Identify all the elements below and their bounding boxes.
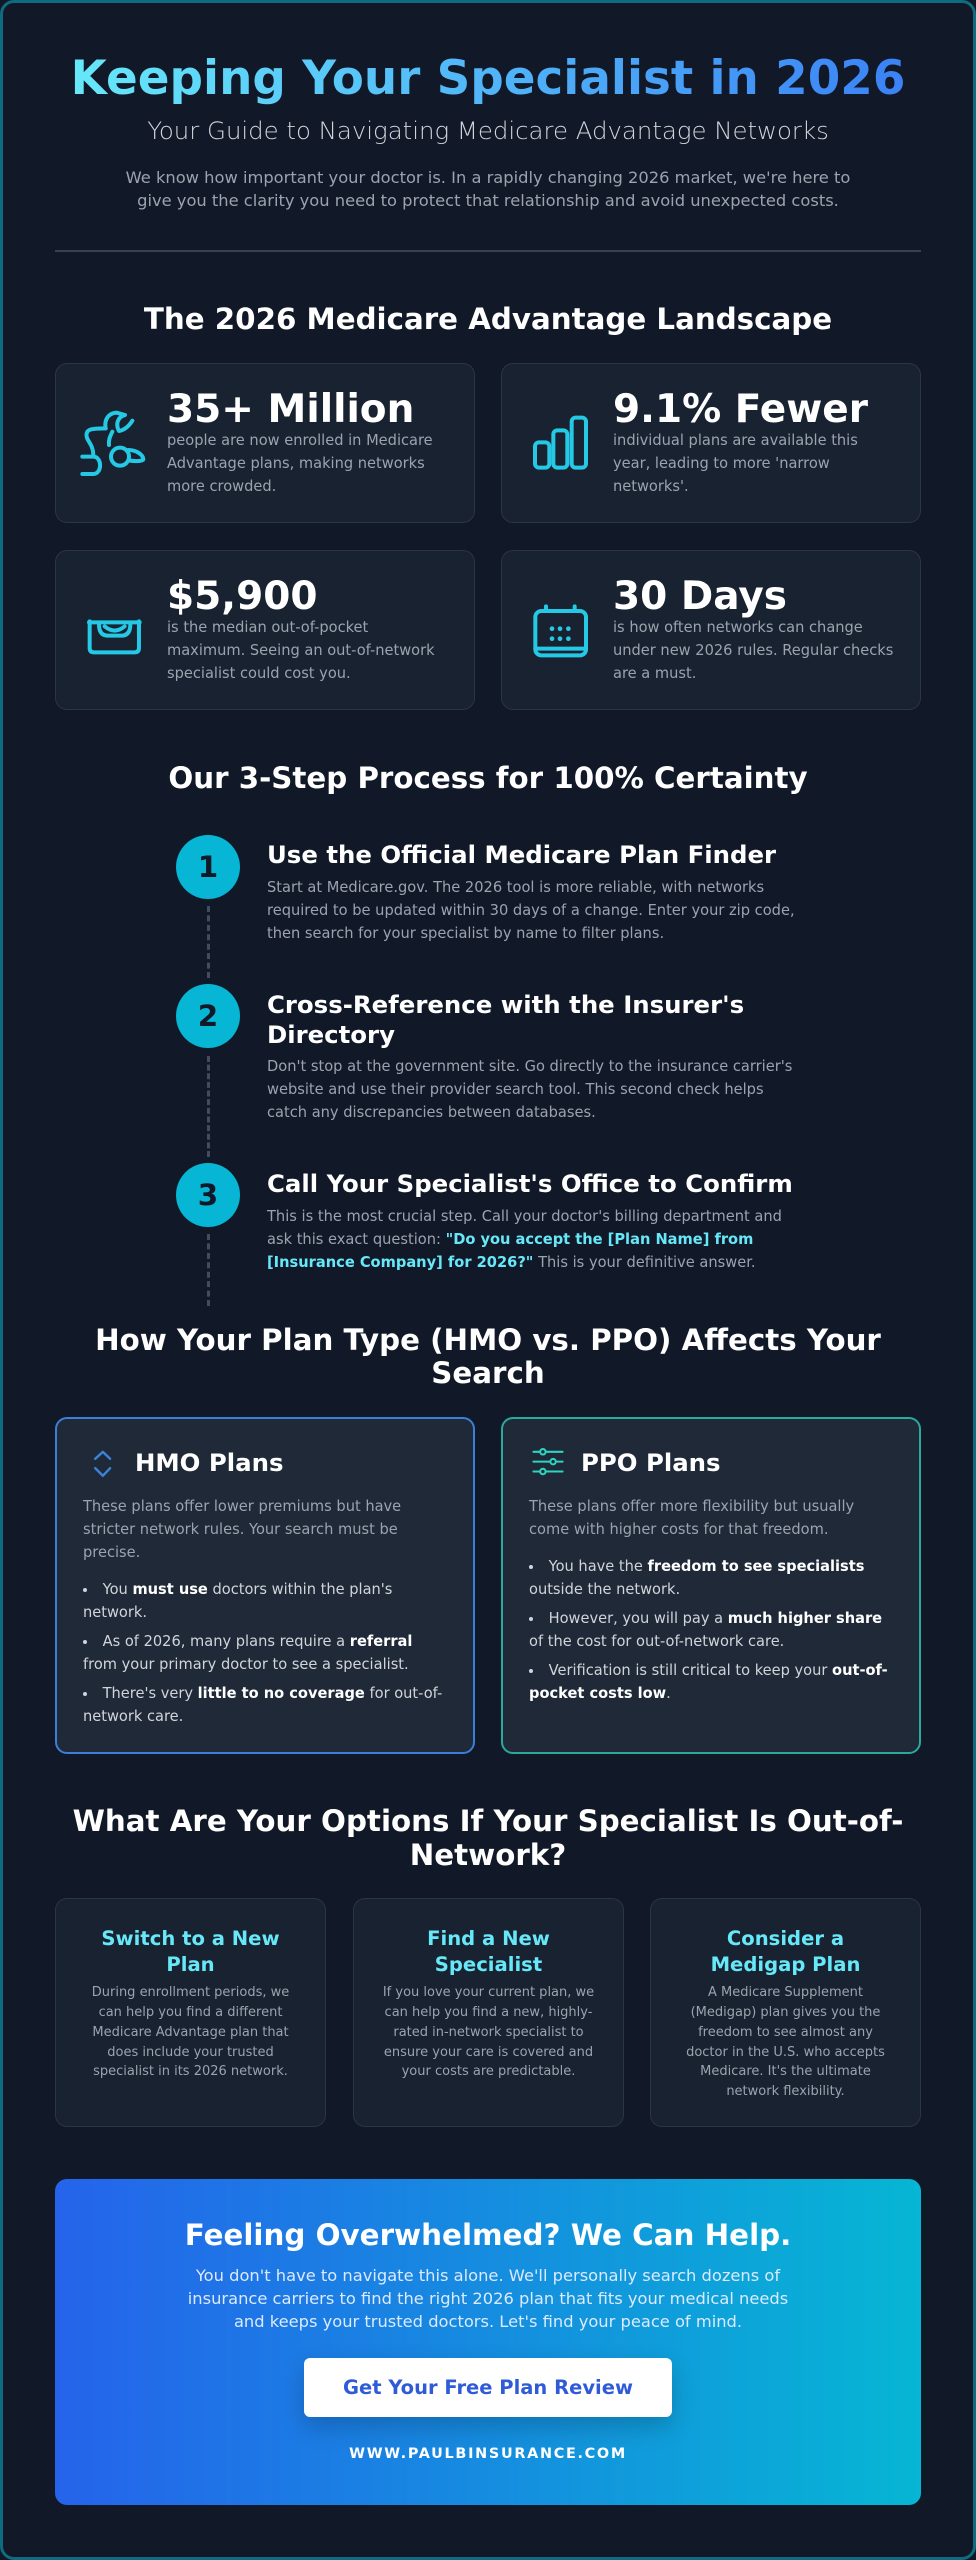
step text	[266, 1208, 782, 1270]
step title: Use the Official Medicare Plan Finder	[267, 840, 776, 869]
step number: 2	[198, 999, 218, 1033]
step text: [Insurance Company] for 2026?" This is your definitive answer.	[267, 1254, 756, 1270]
stat number: 9.1% Fewer	[613, 387, 868, 432]
option text: your costs are predictable.	[402, 2064, 575, 2079]
option title: Consider a	[727, 1926, 844, 1950]
option text: ensure your care is covered and	[384, 2045, 593, 2060]
stat description: individual plans are available this	[613, 432, 858, 449]
plan bullets: from your primary doctor to see a specialist.	[83, 1656, 409, 1673]
option text: (Medigap) plan gives you the	[691, 2005, 880, 2020]
option text: A Medicare Supplement	[708, 1985, 863, 2000]
divider	[55, 250, 921, 252]
cta text	[188, 2266, 788, 2331]
stat description: Advantage plans, making networks	[167, 455, 425, 472]
stat description: under new 2026 rules. Regular checks	[613, 642, 893, 659]
cta text: insurance carriers to find the right 2026 plan that fits your medical needs	[188, 2289, 788, 2308]
plan bullets: network.	[83, 1604, 147, 1621]
cta text: and keeps your trusted doctors. Let's find your peace of mind.	[234, 2312, 742, 2331]
option text	[92, 1985, 289, 2079]
stat description	[613, 619, 893, 682]
stat number: 30 Days	[613, 574, 787, 619]
stat description: people are now enrolled in Medicare	[167, 432, 433, 449]
option text: freedom to see almost any	[698, 2025, 873, 2040]
step text: required to be updated within 30 days of a change. Enter your zip code,	[267, 902, 795, 919]
cta heading: Feeling Overwhelmed? We Can Help.	[185, 2218, 791, 2252]
plan bullets: network care.	[83, 1708, 183, 1725]
heading: options: Network?	[410, 1838, 566, 1872]
stat description: specialist could cost you.	[167, 665, 351, 682]
option text: During enrollment periods, we	[92, 1985, 289, 2000]
connector line 1	[207, 906, 210, 978]
plan intro: precise.	[83, 1544, 140, 1561]
connector line 2	[207, 1056, 210, 1157]
step text: This is the most crucial step. Call your doctor's billing department and	[267, 1208, 782, 1224]
plan bullets: outside the network.	[529, 1581, 680, 1598]
plan intro: These plans offer lower premiums but have	[83, 1498, 401, 1515]
title: Keeping Your Specialist in 2026	[71, 52, 905, 106]
cta button: Get Your Free Plan Review	[343, 2376, 633, 2399]
panel: stat 35+ million	[55, 363, 475, 523]
option text: network flexibility.	[726, 2084, 845, 2099]
stat description	[167, 432, 433, 495]
panel: stat 9.1% fewer	[501, 363, 921, 523]
step text: Don't stop at the government site. Go directly to the insurance carrier's	[267, 1058, 792, 1075]
stat description: year, leading to more 'narrow	[613, 455, 830, 472]
step 1	[176, 835, 795, 942]
step title: Directory	[267, 1020, 395, 1049]
stat description: is how often networks can change	[613, 619, 863, 636]
intro text: give you the clarity you need to protect that relationship and avoid unexpected costs.	[137, 191, 839, 210]
option title: Medigap Plan	[711, 1952, 860, 1976]
option text	[686, 1985, 885, 2099]
step text: Start at Medicare.gov. The 2026 tool is more reliable, with networks	[267, 879, 764, 896]
option title: Find a New	[427, 1926, 550, 1950]
panel: option switch plan	[55, 1898, 326, 2127]
option text: rated in-network specialist to	[393, 2025, 584, 2040]
option text: can help you find a new, highly-	[385, 2005, 592, 2020]
stat description	[613, 432, 858, 495]
cta text: You don't have to navigate this alone. We'll personally search dozens of	[196, 2266, 780, 2285]
step 3	[176, 1163, 793, 1270]
heading: landscape: The 2026 Medicare Advantage Landscape	[144, 302, 832, 336]
plan bullets: There's very little to no coverage for out-of-	[103, 1685, 442, 1702]
heading: plan type: How Your Plan Type (HMO vs. PPO) Affects Your	[95, 1322, 881, 1356]
panel: stat $5,900	[55, 550, 475, 710]
plan bullets: of the cost for out-of-network care.	[529, 1633, 784, 1650]
plan bullets: You have the freedom to see specialists	[549, 1558, 864, 1575]
panel: option medigap	[650, 1898, 921, 2127]
plan intro: come with higher costs for that freedom.	[529, 1521, 828, 1538]
option title: Specialist	[435, 1952, 542, 1976]
heading: process: Our 3-Step Process for 100% Certainty	[168, 760, 808, 794]
cta button	[304, 2358, 672, 2417]
intro text: We know how important your doctor is. In a rapidly changing 2026 market, we're here to	[126, 168, 850, 187]
icon: bar chart	[533, 416, 588, 470]
step text: catch any discrepancies between databases.	[267, 1104, 596, 1121]
step number	[176, 1163, 240, 1227]
plan bullets: As of 2026, many plans require a referral	[103, 1633, 412, 1650]
plan bullets	[83, 1581, 442, 1725]
icon: calendar	[533, 604, 588, 658]
option text: does include your trusted	[107, 2045, 274, 2060]
plan title: PPO Plans	[581, 1448, 721, 1477]
option text: Medicare Advantage plan that	[92, 2025, 289, 2040]
option title: Switch to a New	[101, 1926, 280, 1950]
option text: Medicare. It's the ultimate	[700, 2064, 871, 2079]
heading: options	[73, 1804, 903, 1872]
plan title: HMO Plans	[135, 1448, 284, 1477]
icon: sliders	[532, 1448, 564, 1476]
step text	[267, 1058, 792, 1121]
plan intro	[82, 1498, 401, 1561]
step text: ask this exact question: "Do you accept the [Plan Name] from	[267, 1230, 753, 1248]
step title: Cross-Reference with the Insurer's	[267, 990, 744, 1019]
stat number: 35+ Million	[167, 387, 414, 432]
stat description: networks'.	[613, 478, 689, 495]
option text: If you love your current plan, we	[383, 1985, 594, 2000]
subtitle: Your Guide to Navigating Medicare Advantage Networks	[147, 116, 829, 145]
plan bullets	[529, 1558, 888, 1702]
stat description: is the median out-of-pocket	[167, 619, 368, 636]
option title	[101, 1926, 280, 1976]
step number: 3	[198, 1178, 218, 1212]
stat description: are a must.	[613, 665, 696, 682]
connector line 3	[207, 1234, 210, 1306]
option title	[711, 1926, 860, 1976]
step text: website and use their provider search tool. This second check helps	[267, 1081, 764, 1098]
step title	[267, 990, 744, 1049]
stat description	[167, 619, 435, 682]
panel: stat 30 days	[501, 550, 921, 710]
stat description: maximum. Seeing an out-of-network	[167, 642, 435, 659]
panel: PPO	[501, 1417, 921, 1754]
plan bullets: Verification is still critical to keep your out-of-	[549, 1662, 888, 1679]
option text: doctor in the U.S. who accepts	[686, 2045, 885, 2060]
step text	[267, 879, 795, 942]
step title: Call Your Specialist's Office to Confirm	[267, 1169, 793, 1198]
panel: HMO	[55, 1417, 475, 1754]
heading: plan type	[95, 1322, 881, 1390]
website url: WWW.PAULBINSURANCE.COM	[349, 2446, 627, 2462]
plan intro: These plans offer more flexibility but usually	[529, 1498, 854, 1515]
plan intro	[528, 1498, 854, 1538]
plan intro: stricter network rules. Your search must be	[83, 1521, 398, 1538]
step number: 1	[198, 850, 218, 884]
step text: then search for your specialist by name to filter plans.	[267, 925, 664, 942]
icon: chevrons	[94, 1450, 112, 1478]
option text	[383, 1985, 594, 2079]
option text: specialist in its 2026 network.	[93, 2064, 288, 2079]
option title	[427, 1926, 550, 1976]
step number	[176, 835, 240, 899]
option text: can help you find a different	[99, 2005, 282, 2020]
stat description: more crowded.	[167, 478, 276, 495]
panel: call to action	[55, 2179, 921, 2505]
icon: stethoscope	[80, 410, 146, 476]
heading: plan type: Search	[431, 1356, 545, 1390]
panel: option find specialist	[353, 1898, 624, 2127]
intro text	[126, 168, 850, 210]
plan bullets: pocket costs low.	[529, 1685, 671, 1702]
heading: options: What Are Your Options If Your Specialist Is Out-of-	[73, 1804, 903, 1838]
step number	[176, 984, 240, 1048]
icon: wallet	[87, 619, 142, 654]
plan bullets: You must use doctors within the plan's	[103, 1581, 392, 1598]
step 2	[176, 984, 792, 1121]
option title: Plan	[166, 1952, 215, 1976]
plan bullets: However, you will pay a much higher share	[549, 1610, 882, 1627]
stat number: $5,900	[167, 574, 318, 619]
